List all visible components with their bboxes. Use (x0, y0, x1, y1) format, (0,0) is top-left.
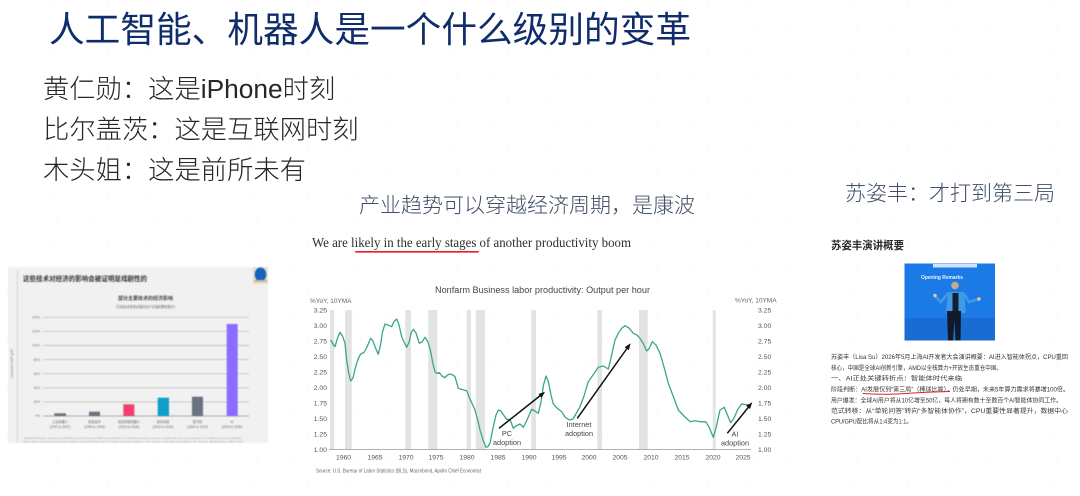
y axis labels: 80% (34, 358, 40, 362)
x axis labels: 1995 (551, 454, 567, 462)
right y axis labels: 3.25 (758, 308, 771, 314)
category labels: (2023 to 2030) (153, 425, 173, 429)
y axis labels: 100% (32, 344, 40, 348)
left y axis labels: 2.25 (314, 370, 327, 376)
chart title: Nonfarm Business labor productivity: Output per hour (435, 285, 651, 296)
category labels: AI (230, 420, 234, 424)
category labels: (2023 to 2030) (222, 425, 242, 429)
right y axis labels: 1.75 (758, 400, 771, 408)
photo: Lisa Su on stage (904, 264, 995, 340)
category labels: (1997 to 2007) (50, 425, 70, 429)
line: productivity (331, 319, 748, 447)
left y axis labels: 2.75 (314, 338, 327, 346)
category labels: (1995 to 2005) (84, 425, 105, 429)
category labels (50, 419, 242, 429)
x axis line (329, 448, 751, 450)
x axis labels: 2005 (612, 454, 628, 462)
right y axis labels: 3.00 (758, 323, 771, 330)
left y axis labels: 1.00 (314, 447, 327, 454)
text block: opinions (43, 74, 359, 185)
y axis labels (32, 316, 40, 418)
left y axis labels: 1.50 (314, 416, 327, 423)
left y axis labels: 3.25 (314, 308, 327, 314)
category labels: (1830 to 1910) (187, 425, 208, 429)
y axis labels: 0% (35, 414, 40, 418)
chart title: 部分主要技术的经济影响 (118, 295, 173, 302)
right y axis labels: 1.00 (758, 447, 771, 454)
x axis labels: 2025 (735, 454, 751, 462)
right y axis labels (758, 308, 771, 454)
red underline (355, 251, 479, 253)
label: AI adoption (721, 430, 749, 448)
x axis labels: 1960 (336, 454, 351, 462)
x axis labels: 2015 (674, 454, 690, 462)
panel: economic impact bar chart (8, 267, 268, 444)
arrow: PC adoption (499, 392, 545, 428)
x axis labels (336, 454, 751, 462)
panel title: 苏姿丰演讲概要 (831, 238, 904, 253)
speech text: 阶段判断：AI发展仅到“第三局”（棒球比喻），仍处早期，未来5年算力需求将暴增100倍。 (831, 386, 1069, 394)
left y axis labels (314, 308, 327, 454)
label: AI adoption: AI (732, 430, 738, 438)
left y axis labels: 1.25 (314, 432, 327, 438)
x axis labels: 1985 (490, 454, 506, 462)
right y axis labels: 2.75 (758, 338, 771, 346)
speech text: 核心，中国是全球AI创新引擎，AMD以全栈算力+开放生态重仓中国。 (831, 364, 1002, 372)
recession bands (330, 310, 716, 450)
category labels: 蒸汽机 (193, 419, 203, 424)
title: 人工智能、机器人是一个什么级别的变革 (49, 2, 691, 53)
y axis labels: 140% (32, 316, 40, 320)
panel title: 这些技术对经济的影响会被证明是戏剧性的 (23, 273, 147, 283)
label: AI adoption: adoption (721, 438, 749, 448)
speech text: 范式转移：从“单轮问答”转向“多智能体协作”，CPU重要性显著提升，数据中心 (831, 407, 1068, 415)
category labels: 自动驾驶机器人 (118, 419, 141, 424)
x axis labels: 1990 (521, 454, 537, 462)
photo: Lisa Su on stage: Opening Remarks (921, 275, 963, 281)
x axis labels: 1975 (428, 454, 444, 462)
panel: productivity chart (310, 235, 777, 474)
y axis labels: 40% (34, 386, 40, 390)
label: Internet adoption: adoption (565, 429, 593, 438)
right y axis labels: 1.50 (758, 416, 771, 423)
arrow: Internet adoption (577, 343, 631, 418)
chart subtitle: （衍进技术采用对国内生产总值的累积提升） (114, 304, 177, 310)
category labels: 自动驾驶 (157, 419, 170, 424)
left y axis labels: 2.50 (314, 354, 327, 361)
heading: industry trend: 产业趋势可以穿越经济周期，是康波 (359, 194, 695, 218)
bars (54, 324, 238, 416)
x axis labels: 2020 (705, 454, 721, 462)
category labels: 信息技术 (88, 419, 102, 424)
y axis title: Cumulative GDP uplift (10, 349, 14, 378)
speech text: 用户爆发：全球AI用户将从10亿增至50亿，每人将拥有数十至数百个AI智能体协同工作。 (831, 396, 1062, 404)
right y axis labels: 2.50 (758, 354, 771, 361)
speech text: 苏姿丰（Lisa Su）2026年5月上海AI开发者大会演讲概要：AI进入智能体拐点，CPU重回 (831, 353, 1068, 361)
arrow: AI adoption (727, 402, 752, 433)
opinion: Cathie Wood: 木头姐：这是前所未有 (43, 155, 306, 185)
right y axis labels: 2.00 (758, 385, 771, 392)
left y axis labels: 3.00 (314, 323, 327, 330)
left y axis labels: 1.75 (314, 400, 327, 408)
right y axis labels: 2.25 (758, 370, 771, 376)
footnote: Note: data undercounts consumer surplus; Industrial Robot and IT impact measures based on US, Europe, and Japanese differences. Source: Bhattacharya, ARK Invest (23, 440, 243, 444)
right axis title: %YoY, 10YMA (735, 298, 777, 304)
red underline (863, 392, 950, 394)
label: Internet adoption: Internet (567, 420, 591, 429)
x axis labels: 2000 (581, 454, 597, 462)
y axis labels: 60% (34, 372, 40, 376)
speech text (831, 353, 1069, 426)
left y axis labels: 2.00 (314, 385, 327, 392)
opinion: Jensen Huang: 黄仁勋：这是iPhone时刻 (43, 74, 335, 104)
x axis labels: 2010 (643, 454, 659, 462)
x axis labels: 1980 (459, 454, 475, 462)
label: Internet adoption (565, 420, 593, 438)
icon: badge (253, 267, 268, 284)
heading: Lisa Su: 苏姿丰：才打到第三局 (845, 182, 1055, 206)
footnote: *Adaptive Robotics, Autonomous Mobility, and AI impact are ARK Invest estimates. AI estimate includes consumer surplus that may not be captured in traditional economic statistics. (23, 436, 243, 440)
label: PC adoption: PC (502, 429, 512, 438)
speech text: 一、AI正处关键转折点：智能体时代来临 (831, 374, 962, 382)
category labels: (2023 to 2030) (119, 425, 139, 429)
gridlines (43, 317, 249, 416)
left axis title: %YoY, 10YMA (310, 298, 352, 305)
x axis labels: 1970 (398, 454, 414, 462)
label: PC adoption (493, 429, 521, 447)
speech text: CPU/GPU配比将从1:4变为1:1。 (831, 418, 912, 426)
x axis labels: 1965 (367, 454, 383, 462)
footnote (23, 436, 243, 444)
opinion: Bill Gates: 比尔盖茨：这是互联网时刻 (43, 114, 359, 144)
y axis labels: 20% (34, 400, 40, 404)
y axis labels: 120% (32, 330, 40, 334)
right y axis labels: 1.25 (758, 432, 771, 438)
chart headline: We are likely in the early stages of another productivity boom (312, 235, 632, 250)
panel: Lisa Su speech summary (831, 238, 1069, 426)
label: PC adoption: adoption (493, 438, 521, 447)
source note: Source: U.S. Bureau of Labor Statistics (BLS), Macrobond, Apollo Chief Economist (316, 468, 482, 474)
category labels: 工业机器人 (52, 419, 69, 424)
